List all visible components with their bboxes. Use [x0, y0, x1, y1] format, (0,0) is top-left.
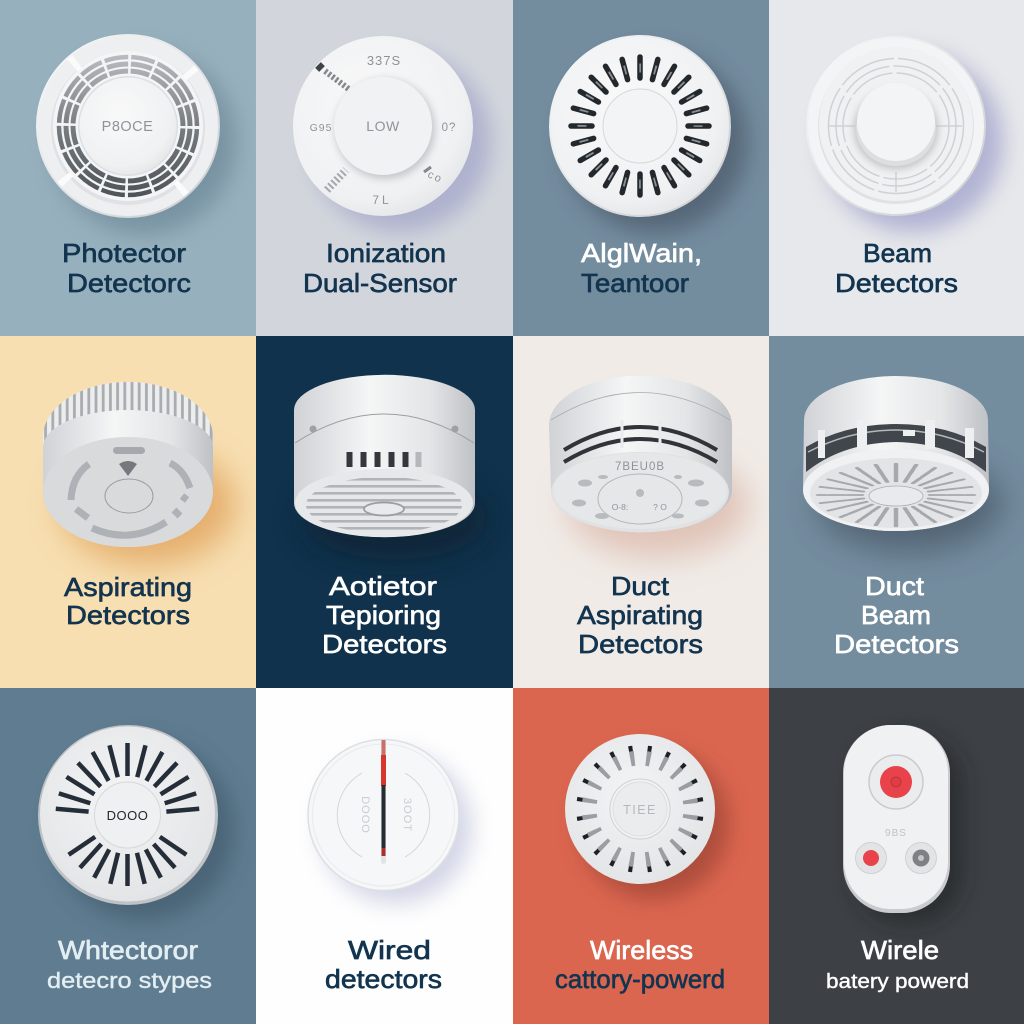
panel: beam detectors: [769, 0, 1024, 336]
icon: wired flat detector: [308, 740, 472, 904]
panel: duct beam detectors: [769, 336, 1024, 688]
panel: duct aspirating detectors: [513, 336, 769, 688]
device label: 9BS: [885, 828, 907, 839]
icon: labelled round detector: [293, 36, 491, 232]
panel: wireless button unit: [769, 688, 1024, 1024]
device labels: 3OOT: [401, 798, 413, 832]
heading: duct beam detectors: [834, 571, 959, 659]
device label: P8OCE: [102, 119, 153, 135]
heading: dark tepioring detectors: [322, 571, 447, 659]
device labels: O-8:: [612, 502, 628, 512]
heading: aspirating detectors: Aspirating: [64, 572, 192, 602]
panel background: [513, 0, 769, 336]
heading: third detector: Teantoor: [581, 268, 689, 298]
device labels: G95: [310, 122, 332, 134]
panel: dark tepioring detectors: [256, 336, 513, 688]
heading: duct beam detectors: Detectors: [834, 629, 959, 659]
heading: dark tepioring detectors: Tepioring: [326, 600, 441, 630]
heading: photector detectorc: Photector: [62, 238, 186, 268]
heading: wireless button unit: [826, 935, 969, 993]
heading: photector detectorc: [62, 238, 191, 298]
panel: third detector: [513, 0, 769, 336]
heading: duct beam detectors: Duct: [865, 571, 925, 601]
heading: whtectoror detector types: detecro stypes: [47, 968, 212, 993]
heading: aspirating detectors: [64, 572, 192, 630]
heading: wireless button unit: batery powerd: [826, 971, 969, 993]
device label: DOOO: [107, 808, 148, 823]
heading: wired detectors: [325, 935, 442, 994]
device labels: DOOO: [359, 796, 371, 834]
panel: ionization dual-sensor: [256, 0, 513, 336]
heading: beam detectors: Beam: [863, 238, 932, 268]
icon: grilled round detector: [36, 34, 236, 234]
icon: embossed round detector: [806, 36, 1003, 232]
heading: duct aspirating detectors: Aspirating: [577, 600, 703, 630]
heading: photector detectorc: Detectorc: [67, 268, 191, 298]
panel background: [513, 336, 769, 688]
device labels: [310, 53, 456, 207]
device labels: co: [426, 169, 445, 186]
device labels: [359, 796, 413, 834]
panel background: [513, 688, 769, 1024]
icon: cylindrical detector: [294, 375, 488, 560]
panel background: [769, 688, 1024, 1024]
heading: ionization dual-sensor: Dual-Sensor: [303, 268, 457, 298]
heading: wireless button unit: Wirele: [861, 935, 939, 965]
heading: duct aspirating detectors: [577, 571, 703, 659]
device labels: ? O: [653, 502, 667, 512]
panel background: [256, 688, 513, 1024]
heading: third detector: [581, 238, 702, 298]
panel: wired detectors: [307, 738, 481, 994]
heading: wireless battery-powered: cattory-powerd: [555, 964, 725, 994]
heading: aspirating detectors: Detectors: [66, 600, 190, 630]
heading: wireless battery-powered: [555, 935, 725, 994]
icon: aspirating detector: [43, 382, 236, 565]
device labels: [612, 461, 667, 512]
panel background: [0, 336, 256, 688]
panel background: [0, 688, 256, 1024]
icon: slotted cylinder detector: [549, 376, 748, 557]
panel: wireless battery-powered: [513, 688, 769, 1024]
heading: wired detectors: Wired: [348, 935, 431, 965]
icon: slotted wireless detector: [565, 734, 729, 899]
heading: duct aspirating detectors: Duct: [611, 571, 670, 601]
icon: radial slot detector: [549, 35, 747, 233]
heading: ionization dual-sensor: [303, 238, 457, 298]
device labels: 7BEU0B: [615, 461, 665, 473]
panel background: [769, 0, 1024, 336]
heading: beam detectors: [835, 238, 958, 298]
panel background: [256, 336, 513, 688]
heading: dark tepioring detectors: Detectors: [322, 629, 447, 659]
device label: TIEE: [623, 803, 657, 817]
panel: aspirating detectors: [0, 336, 256, 688]
icon: bold radial detector: [38, 725, 234, 921]
heading: ionization dual-sensor: Ionization: [326, 238, 446, 268]
device labels: 7L: [372, 193, 392, 207]
panel background: [0, 0, 256, 336]
heading: third detector: AlglWain,: [581, 238, 702, 268]
heading: whtectoror detector types: [47, 935, 212, 993]
heading: whtectoror detector types: Whtectoror: [58, 935, 198, 965]
panel: photoelectric detector: [0, 0, 256, 336]
device labels: 0?: [442, 122, 456, 134]
device labels: LOW: [366, 118, 400, 134]
device labels: 337S: [367, 53, 401, 68]
heading: duct aspirating detectors: Detectors: [578, 629, 703, 659]
heading: beam detectors: Detectors: [835, 268, 958, 298]
heading: wireless battery-powered: Wireless: [590, 935, 693, 965]
heading: duct beam detectors: Beam: [861, 600, 931, 630]
icon: rounded push-button unit: [843, 725, 962, 923]
panel: whtectoror detector types: [0, 688, 256, 1024]
heading: wired detectors: detectors: [325, 964, 442, 994]
icon: windowed cylinder detector: [803, 376, 1002, 551]
panel background: [256, 0, 513, 336]
panel background: [769, 336, 1024, 688]
heading: dark tepioring detectors: Aotietor: [329, 571, 437, 601]
